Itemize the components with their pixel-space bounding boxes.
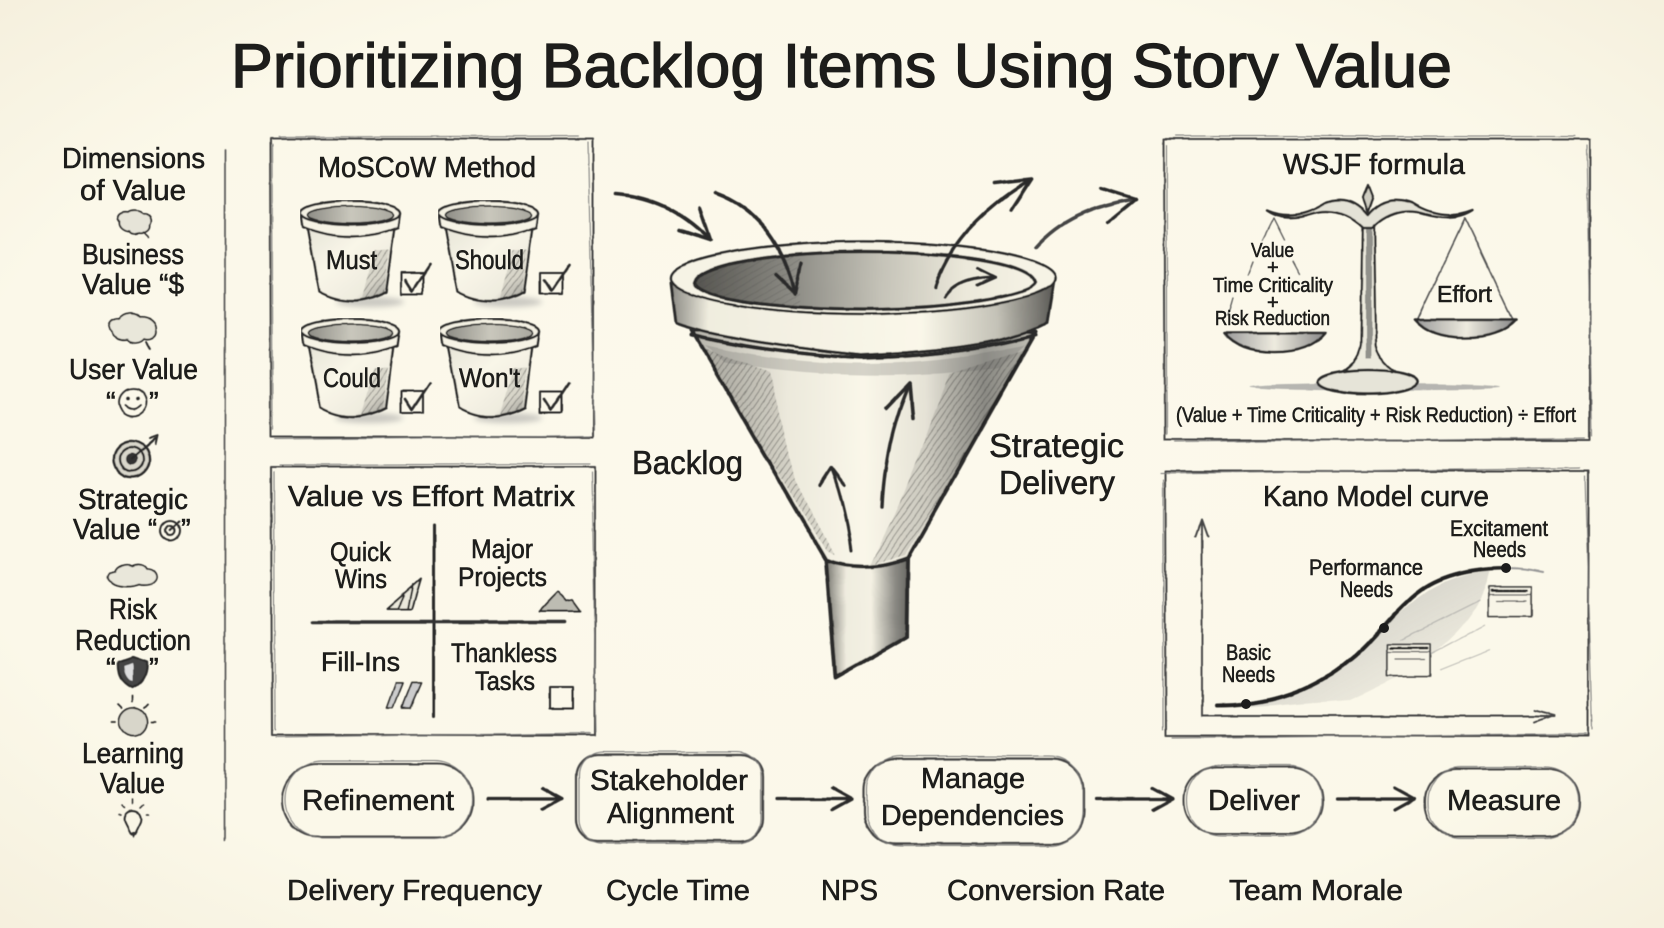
arrow: small inside rim [945, 268, 995, 297]
left pan text: Time Criticality [1213, 275, 1333, 297]
Kano heading: Kano Model curve [1263, 481, 1489, 513]
label: should: Should [455, 245, 524, 275]
Kano curve line [1217, 568, 1543, 706]
step: manage dependencies [864, 756, 1084, 846]
label: won't: Won't [459, 363, 520, 393]
bucket: should [439, 201, 542, 307]
WSJF formula text: (Value + Time Criticality + Risk Reduction) ÷ Effort [1176, 404, 1576, 427]
matrix frame [271, 464, 596, 737]
step: deliver [1184, 765, 1323, 836]
scale beam and finial [1267, 200, 1473, 228]
MoSCoW heading: MoSCoW Method [318, 152, 536, 184]
step: measure [1425, 767, 1580, 838]
panel: dimensions of value sidebar [62, 143, 205, 838]
icon: smiley in quotes [106, 387, 159, 419]
panel: Kano model curve [1160, 468, 1592, 738]
step: stakeholder alignment: Stakeholder [590, 765, 748, 797]
step: refinement [282, 761, 473, 838]
funnel illustration [671, 242, 1055, 678]
icon: thankless tasks square [550, 687, 573, 709]
arrow: into funnel centre [715, 193, 801, 293]
learning value label: Value [100, 768, 165, 800]
icon: shield in quotes [106, 653, 159, 688]
business value label: Business [82, 239, 184, 271]
arrow: dependencies to deliver [1096, 788, 1173, 810]
left pan strings [1228, 218, 1300, 315]
arrow: deliver to measure [1337, 788, 1415, 810]
quadrant: quick wins: Wins [335, 564, 387, 594]
Kano frame [1160, 468, 1592, 738]
arrow: upward in cone large [882, 383, 913, 507]
arrow: upward in cone small [820, 468, 851, 550]
arrow: out of funnel right [1036, 188, 1136, 247]
point: basic needs [1241, 699, 1251, 709]
step: refinement: Refinement [302, 785, 454, 817]
strategic value label: Strategic [78, 484, 188, 516]
step: measure: Measure [1447, 785, 1561, 817]
checkbox: won't [540, 383, 569, 413]
title: Prioritizing Backlog Items Using Story Value [231, 32, 1452, 101]
label: strategic delivery: Strategic [989, 427, 1124, 464]
icon: light bulb [119, 799, 149, 838]
metric: cycle time: Cycle Time [606, 875, 750, 907]
arrow: alignment to dependencies [777, 788, 852, 810]
scale base shadow [1250, 384, 1500, 390]
left pan text: Value [1251, 240, 1294, 262]
funnel rim band [671, 280, 1054, 355]
icon: target with arrow [114, 435, 158, 477]
matrix axes [312, 525, 564, 717]
WSJF frame [1164, 136, 1592, 442]
quadrant: major projects: Projects [458, 562, 547, 592]
icon: user value cloud [109, 313, 156, 349]
icon: smiley in quotes: “ [106, 387, 116, 419]
icon: small target [160, 522, 180, 540]
quadrant: quick wins: Quick [330, 537, 391, 567]
icon: risk cloud [108, 565, 157, 587]
Kano curve shading [1240, 570, 1490, 708]
arrow: out of funnel upper [935, 179, 1031, 287]
panel: MoSCoW method [270, 136, 594, 439]
matrix heading: Value vs Effort Matrix [288, 481, 576, 513]
right pan strings [1417, 218, 1513, 320]
step: stakeholder alignment: Alignment [607, 798, 734, 830]
metric: conversion rate: Conversion Rate [947, 875, 1165, 907]
step: manage dependencies: Dependencies [881, 800, 1064, 832]
sidebar divider [224, 150, 226, 840]
left pan text: Risk Reduction [1215, 308, 1330, 330]
bucket: must [301, 201, 404, 307]
panel: value vs effort matrix [271, 464, 596, 737]
left pan text: + [1267, 292, 1279, 314]
icon: sun [111, 696, 155, 736]
label: strategic delivery: Delivery [999, 464, 1115, 501]
label: excitament needs: Needs [1473, 537, 1526, 562]
funnel inner opening [694, 252, 1036, 309]
panel: WSJF formula [1164, 136, 1592, 442]
label: performance needs: Needs [1340, 577, 1393, 602]
icon: excitement calendar box [1489, 587, 1531, 616]
quadrant: thankless tasks: Thankless [451, 638, 557, 668]
funnel rim top [671, 242, 1055, 314]
arrow: refinement to alignment [488, 788, 562, 810]
checkbox: should [540, 264, 569, 294]
checkbox: must [401, 264, 430, 294]
point: performance needs [1379, 623, 1389, 633]
label: basic needs: Basic [1226, 640, 1271, 665]
right pan [1415, 320, 1516, 338]
business value label: Value “$ [82, 269, 184, 301]
strategic value label: Value “ [73, 514, 157, 546]
user value label: User Value [69, 354, 198, 386]
left pan [1224, 333, 1325, 352]
strategic value label: ” [181, 514, 191, 546]
scale post and base [1336, 225, 1402, 377]
process flow [282, 752, 1580, 846]
label: basic needs: Needs [1222, 662, 1275, 687]
sidebar heading: of Value [80, 175, 186, 207]
left pan text: + [1267, 257, 1279, 279]
icon: smiley in quotes: ” [149, 387, 159, 419]
label: backlog: Backlog [632, 444, 743, 481]
checkbox: could [401, 383, 430, 413]
quadrant: thankless tasks: Tasks [475, 666, 535, 696]
icon: fill-ins slashes [387, 683, 421, 708]
icon: major projects mountain [540, 592, 580, 611]
risk reduction label: Reduction [75, 625, 191, 657]
icon: quick wins wedge [387, 579, 421, 609]
step: stakeholder alignment [576, 752, 763, 843]
metric: delivery frequency: Delivery Frequency [287, 875, 542, 907]
right pan text: Effort [1437, 281, 1493, 307]
MoSCoW frame [270, 136, 594, 439]
icon: shield in quotes: ” [149, 653, 159, 685]
sidebar heading: Dimensions [62, 143, 205, 175]
balance scale [1224, 185, 1516, 394]
icon: shield in quotes: “ [106, 653, 116, 685]
learning value label: Learning [82, 738, 184, 770]
step: manage dependencies: Manage [921, 763, 1025, 795]
label: must: Must [326, 245, 377, 275]
bucket: won't [440, 319, 542, 423]
Kano axes [1196, 520, 1554, 722]
WSJF heading: WSJF formula [1283, 149, 1466, 181]
metrics row [287, 875, 1403, 907]
metric: NPS: NPS [821, 875, 878, 907]
bucket: could [302, 319, 403, 423]
step: deliver: Deliver [1208, 785, 1300, 817]
arrow: into funnel left [615, 194, 710, 240]
icon: performance calendar box [1387, 644, 1430, 676]
funnel cone [692, 330, 1036, 567]
label: could: Could [323, 363, 381, 393]
label: excitament needs: Excitament [1450, 516, 1548, 541]
icon: business value cloud [118, 211, 151, 237]
quadrant: fill-ins: Fill-Ins [321, 647, 400, 677]
metric: team morale: Team Morale [1229, 875, 1403, 907]
quadrant: major projects: Major [471, 534, 533, 564]
funnel spout [826, 558, 908, 678]
label: performance needs: Performance [1309, 555, 1423, 580]
point: excitement needs [1501, 563, 1511, 573]
risk reduction label: Risk [109, 594, 157, 626]
